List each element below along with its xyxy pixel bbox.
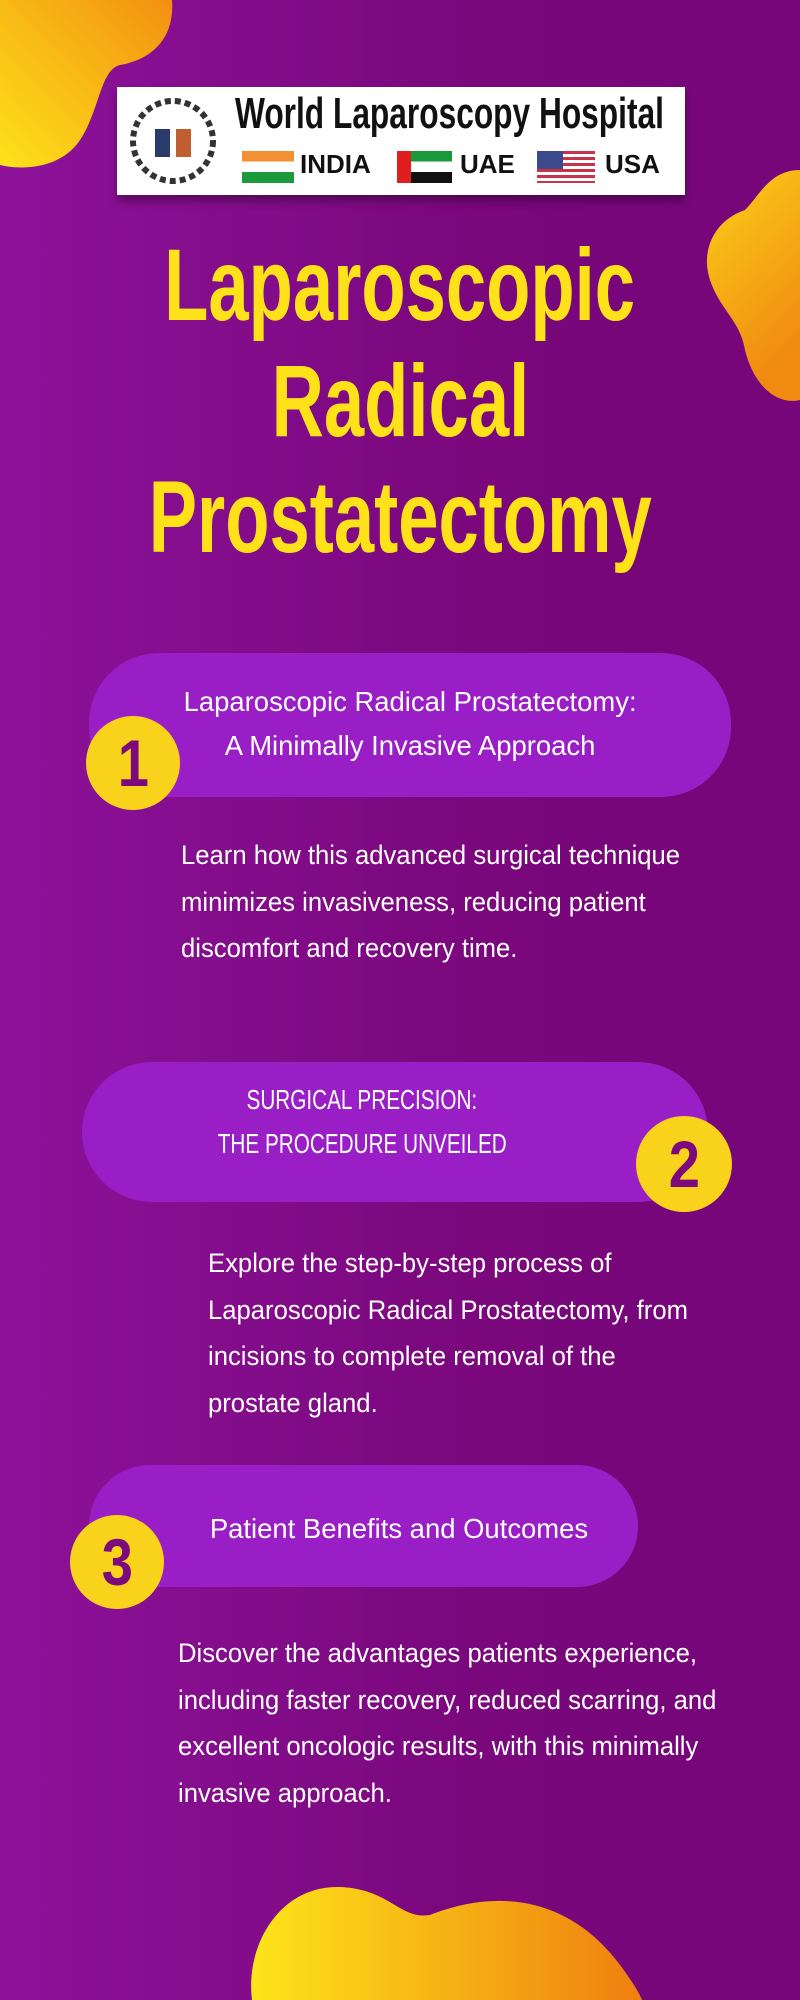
panel: section 1 [86, 653, 731, 963]
flags and countries: INDIA [300, 149, 371, 179]
title: Prostatectomy [148, 460, 652, 574]
body text 2: Laparoscopic Radical Prostatectomy, from [208, 1294, 688, 1324]
body text 3: excellent oncologic results, with this minimally [178, 1731, 698, 1761]
icon: laurel emblem [130, 98, 216, 184]
number badge 2: 2 [668, 1127, 700, 1201]
title: Laparoscopic [165, 228, 635, 342]
heading pill 1: A Minimally Invasive Approach [225, 730, 595, 761]
body text 2: Explore the step-by-step process of [208, 1248, 611, 1278]
number badge 3: 3 [101, 1525, 133, 1599]
flags and countries: UAE [460, 149, 515, 179]
heading pill 3: Patient Benefits and Outcomes [210, 1513, 588, 1544]
decorative blob right [706, 170, 800, 401]
title [148, 228, 652, 574]
heading pill 1 [89, 653, 731, 797]
number badge 3 [70, 1515, 164, 1609]
body text 2: prostate gland. [208, 1388, 378, 1418]
panel: section 2 [82, 1062, 732, 1418]
body text 2 [208, 1248, 688, 1418]
heading pill 1: Laparoscopic Radical Prostatectomy: [184, 686, 636, 717]
decorative blob top-left [0, 0, 172, 168]
number badge 1: 1 [117, 726, 149, 800]
number badge 1 [86, 716, 180, 810]
heading pill 2: THE PROCEDURE UNVEILED [218, 1128, 506, 1159]
flags and countries [242, 149, 660, 183]
body text 3: Discover the advantages patients experience, [178, 1638, 697, 1668]
number badge 2 [636, 1116, 732, 1212]
body text 3: including faster recovery, reduced scarring, and [178, 1684, 716, 1714]
body text 1: Learn how this advanced surgical technique [181, 840, 680, 870]
panel: section 3 [70, 1465, 716, 1808]
decorative blob bottom [251, 1887, 642, 2000]
title: Radical [271, 344, 529, 458]
body text 1 [181, 840, 680, 963]
flags and countries: USA [605, 149, 660, 179]
heading pill 3 [89, 1465, 638, 1587]
heading pill 2 [82, 1062, 708, 1202]
body text 3: invasive approach. [178, 1778, 392, 1808]
body text 1: minimizes invasiveness, reducing patient [181, 886, 646, 916]
body text 3 [178, 1638, 716, 1808]
logo text: World Laparoscopy Hospital [235, 89, 664, 138]
heading pill 2: SURGICAL PRECISION: [247, 1084, 477, 1115]
body text 1: discomfort and recovery time. [181, 933, 517, 963]
body text 2: incisions to complete removal of the [208, 1341, 616, 1371]
logo [117, 87, 685, 195]
